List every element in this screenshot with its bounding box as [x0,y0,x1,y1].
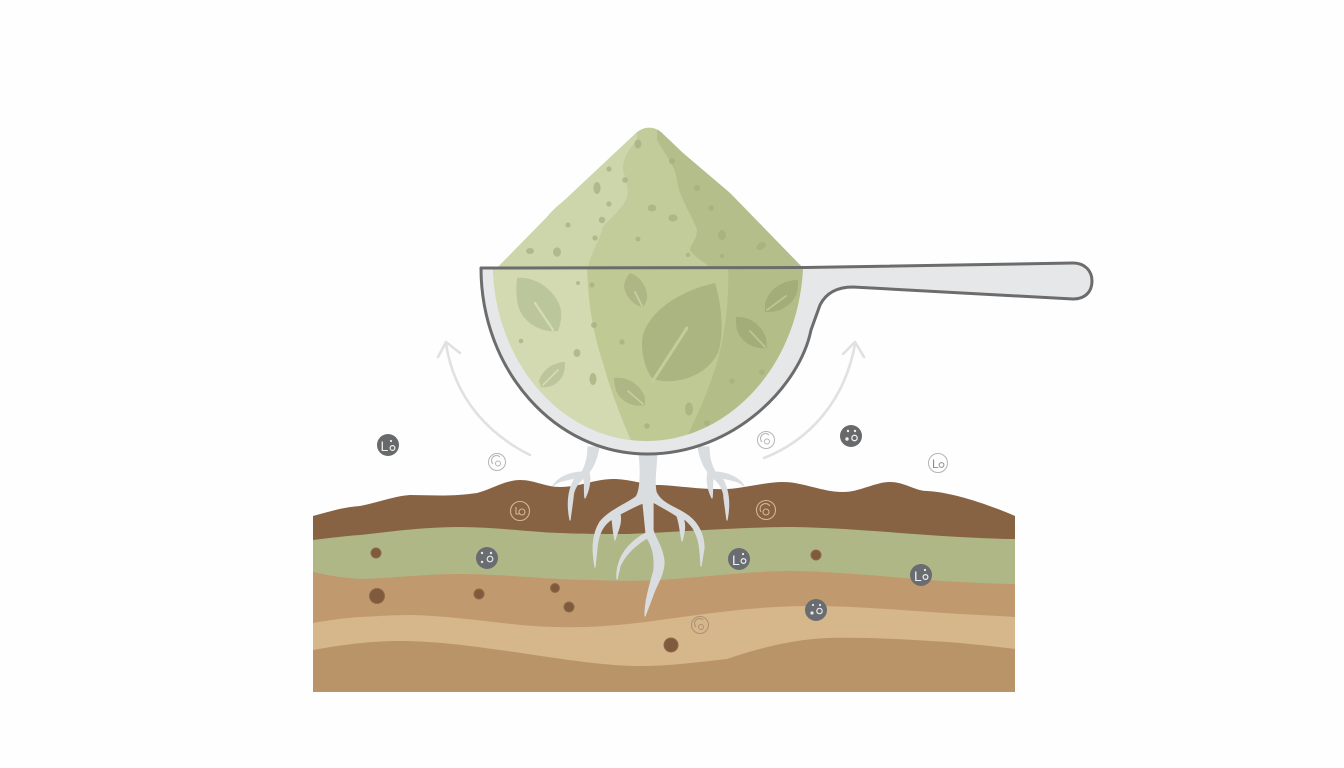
nutrient icon: dark upper right [840,425,862,447]
nutrient icon: outline centre right [758,432,774,448]
leaf: lower left [539,362,565,387]
powder mound [498,128,801,266]
powder specks in bowl [519,281,765,429]
nutrient icon: dark green band left [476,547,498,569]
soil particles [370,548,821,652]
leaf: upper right [765,280,798,312]
scoop outline and handle [481,263,1092,454]
leaf: upper left [516,278,561,331]
nutrient icon: dark upper left: L [380,438,388,454]
nutrient icon: dark green band centre: L [732,552,740,568]
leaf: upper centre [624,273,647,307]
leaf: lower centre [614,378,645,406]
nutrient icon: soil outline right [756,500,776,520]
arrow: left upward [438,342,530,455]
scoop glass body [481,263,1092,454]
nutrient icon: faded outline bottom [692,616,708,634]
nutrient icon: dark green band right [910,564,932,586]
nutrient icon: dark upper left [377,434,399,456]
arrow: right upward [764,342,864,458]
soil cross-section [313,479,1015,692]
nutrient icon: dark tan band [805,599,827,621]
leaf: right middle [736,317,767,348]
roots [553,447,744,616]
nutrient icon: outline far right: L [932,457,939,471]
nutrient icon: dark green band right: L [914,568,922,584]
powder in bowl [490,266,810,446]
nutrient icon: outline far right [928,454,948,472]
powder specks on mound [526,140,767,258]
nutrient icon: soil outline left [510,502,530,520]
leaf: large centre [642,283,722,382]
nutrient icon: dark green band centre [728,548,750,570]
nutrient icon: outline left [488,454,506,470]
infographic illustration [313,128,1094,692]
